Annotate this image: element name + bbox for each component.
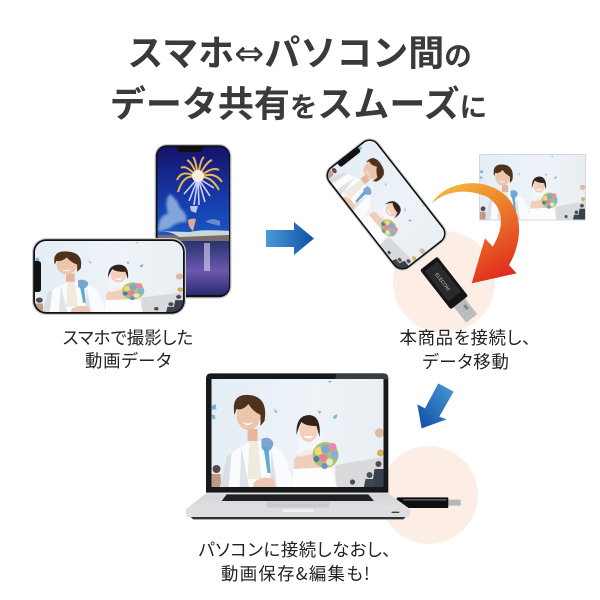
photo: transferred data [479, 154, 586, 221]
laptop screen [210, 377, 386, 489]
USB memory in laptop [397, 497, 461, 508]
caption: step 1 [63, 325, 193, 373]
USB memory [420, 257, 480, 325]
laptop [186, 373, 410, 519]
caption: step 2: 本商品を接続し、 [400, 325, 532, 350]
title: データ共有をスムーズに [110, 84, 487, 124]
USB memory: ELECOM [433, 272, 451, 292]
highlight circle: USB on laptop [380, 446, 478, 544]
caption: step 2: データ移動 [422, 349, 510, 374]
laptop body [186, 373, 410, 519]
highlight circle: USB on phone [393, 231, 495, 333]
caption: step 2 [400, 325, 532, 374]
caption: step 3: 動画保存&編集も! [221, 561, 371, 586]
step 1: smartphones with captured video [32, 144, 232, 315]
caption: step 3 [198, 537, 392, 586]
landscape phone with wedding video [32, 238, 186, 315]
caption: step 1: 動画データ [85, 348, 172, 373]
title: スマホ⇔パソコン間の [127, 32, 472, 74]
portrait phone with fireworks [154, 144, 232, 298]
caption: step 1: スマホで撮影した [63, 325, 193, 350]
curved orange arrow [432, 183, 519, 283]
arrow: down-left [417, 383, 454, 428]
title [110, 32, 487, 124]
tilted phone [321, 134, 451, 275]
arrow: right [266, 222, 314, 255]
caption: step 3: パソコンに接続しなおし、 [198, 537, 392, 562]
